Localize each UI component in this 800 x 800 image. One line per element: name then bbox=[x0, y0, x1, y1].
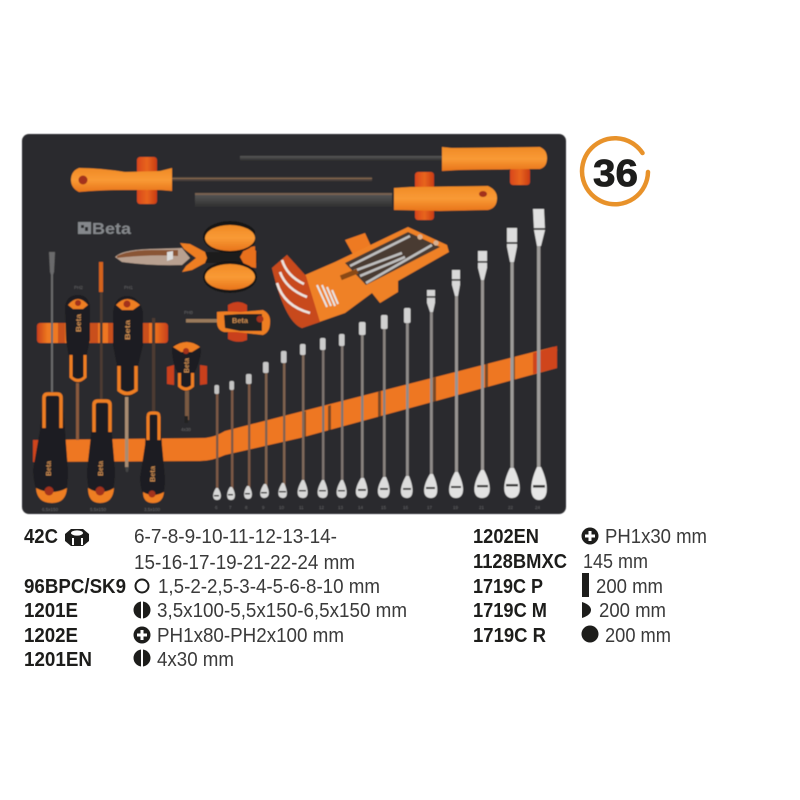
wrench size labels: 10 bbox=[279, 505, 285, 510]
wrench 16 bbox=[401, 308, 413, 498]
wrench 19 bbox=[449, 270, 463, 498]
row: 1719C R bbox=[473, 625, 671, 647]
wrench 14 bbox=[356, 322, 368, 498]
tool: Phillips screwdriver PH2: PH1 bbox=[124, 285, 133, 290]
row: 1128BMXC: 1128BMXC bbox=[473, 551, 567, 573]
row: 1202E: 1202E bbox=[24, 625, 78, 647]
wrench 17 bbox=[424, 290, 437, 498]
icon: hex nut bbox=[65, 529, 89, 546]
wrench 22 bbox=[504, 228, 520, 498]
wrench 11 bbox=[298, 344, 308, 498]
tool: Phillips screwdriver PH1 bbox=[65, 285, 90, 440]
tool: hex key set bbox=[272, 227, 449, 328]
wrench size labels: 9 bbox=[262, 505, 265, 510]
wrench size labels: 17 bbox=[427, 505, 433, 510]
row: 1719C P: 1719C P bbox=[473, 576, 543, 598]
legend: right column bbox=[473, 526, 707, 647]
wrench size labels: 16 bbox=[403, 505, 409, 510]
wrench size labels: 19 bbox=[453, 505, 459, 510]
row: 96BPC/SK9: 1,5-2-2,5-3-4-5-6-8-10 mm bbox=[158, 576, 380, 598]
tool: medium flat screwdriver: Beta bbox=[98, 461, 105, 476]
wrench size labels: 21 bbox=[479, 505, 485, 510]
wrench 21 bbox=[474, 251, 490, 498]
tool: Phillips screwdriver PH2: Beta bbox=[125, 320, 132, 340]
badge: 36 pieces bbox=[582, 138, 648, 204]
row: 42C: 6-7-8-9-10-11-12-13-14- bbox=[134, 526, 337, 548]
icon: round file section bbox=[582, 626, 598, 642]
row: 1719C P bbox=[473, 573, 663, 598]
tool: small flat screwdriver: 3,5x100 bbox=[144, 507, 161, 512]
wrench size labels: 8 bbox=[245, 505, 248, 510]
wrench 10 bbox=[278, 351, 287, 498]
tool: round file, upper right bbox=[240, 147, 547, 185]
icon: slotted tip bbox=[134, 649, 150, 667]
wrench size labels: 22 bbox=[508, 505, 514, 510]
row: 1719C M bbox=[473, 600, 666, 622]
row: 96BPC/SK9: 96BPC/SK9 bbox=[24, 576, 126, 598]
tool: stubby flat screwdriver bbox=[167, 342, 207, 432]
wrench size labels: 11 bbox=[299, 505, 304, 510]
row: 1719C P: 200 mm bbox=[596, 576, 663, 598]
icon: slotted tip bbox=[134, 601, 150, 619]
wrench 9 bbox=[260, 362, 269, 498]
wrench size labels: 6 bbox=[215, 505, 218, 510]
tool: stubby Phillips screwdriver, horizontal bbox=[184, 302, 270, 342]
tool: large flat screwdriver: Beta bbox=[46, 461, 53, 476]
badge: 36 pieces: 36 bbox=[593, 153, 638, 195]
wrench 13 bbox=[337, 334, 347, 498]
row: 1202E bbox=[24, 625, 344, 647]
tool: large flat screwdriver: 6,5x150 bbox=[42, 507, 59, 512]
row: 42C bbox=[24, 526, 355, 574]
row: 1719C M: 1719C M bbox=[473, 600, 547, 622]
wrench 8 bbox=[244, 374, 252, 499]
tool: large flat screwdriver bbox=[33, 252, 68, 512]
tool: stubby Phillips screwdriver, horizontal: Beta bbox=[232, 318, 248, 325]
row: 1201E: 3,5x100-5,5x150-6,5x150 mm bbox=[157, 600, 407, 622]
tool: scissors bbox=[115, 221, 257, 293]
wrench size labels bbox=[215, 505, 541, 510]
tool: flat file, centre bbox=[195, 172, 497, 220]
wrench 6 bbox=[213, 385, 221, 500]
wrench size labels: 24 bbox=[535, 505, 541, 510]
tool: half-round file, upper left bbox=[71, 157, 372, 204]
row: 1202EN: PH1x30 mm bbox=[605, 526, 707, 548]
row: 1719C R: 1719C R bbox=[473, 625, 547, 647]
row: 96BPC/SK9 bbox=[24, 576, 380, 598]
wrench size labels: 13 bbox=[338, 505, 344, 510]
row: 1201E bbox=[24, 600, 407, 622]
row: 1201EN: 4x30 mm bbox=[157, 649, 234, 671]
row: 1202EN bbox=[473, 526, 707, 548]
row: 1719C R: 200 mm bbox=[605, 625, 671, 647]
tool: stubby flat screwdriver: 4x30 bbox=[181, 427, 191, 432]
row: 1719C M: 200 mm bbox=[599, 600, 666, 622]
tool: small flat screwdriver bbox=[140, 318, 165, 512]
row: 42C: 42C bbox=[24, 526, 58, 548]
rail: upper left orange holder bbox=[37, 323, 168, 343]
tool: medium flat screwdriver: 5,5x150 bbox=[90, 507, 107, 512]
wrench 24 bbox=[531, 209, 547, 500]
row: 42C: 15-16-17-19-21-22-24 mm bbox=[134, 552, 355, 574]
wrench size labels: 14 bbox=[358, 505, 364, 510]
row: 1202EN: 1202EN bbox=[473, 526, 539, 548]
tool: medium flat screwdriver bbox=[87, 262, 115, 512]
tool: stubby Phillips screwdriver, horizontal: PH0 bbox=[184, 310, 193, 315]
row: 1128BMXC: 145 mm bbox=[583, 551, 648, 573]
wrench 15 bbox=[378, 315, 390, 498]
row: 1202E: PH1x80-PH2x100 mm bbox=[157, 625, 344, 647]
wrench 12 bbox=[318, 338, 328, 498]
tool: stubby flat screwdriver: Beta bbox=[184, 358, 191, 373]
wrench size labels: 15 bbox=[381, 505, 387, 510]
rail: long diagonal orange holder bbox=[33, 346, 557, 462]
tool: Phillips screwdriver PH1: PH2 bbox=[74, 285, 83, 290]
row: 1201EN: 1201EN bbox=[24, 649, 92, 671]
icon: Phillips tip bbox=[134, 626, 150, 644]
icon: hex socket ring bbox=[136, 580, 148, 592]
icon: half-round file section bbox=[582, 602, 591, 618]
icon: Phillips tip bbox=[582, 528, 598, 544]
legend: left column bbox=[24, 526, 407, 671]
tool set: combination wrenches 6 to 24 mm bbox=[213, 209, 547, 500]
icon: flat file section bbox=[582, 573, 589, 597]
tool: small flat screwdriver: Beta bbox=[150, 466, 157, 482]
row: 1201EN bbox=[24, 649, 234, 671]
logo: Beta bbox=[78, 221, 131, 238]
row: 1201E: 1201E bbox=[24, 600, 78, 622]
panel: foam tool tray bbox=[22, 134, 566, 514]
wrench 7 bbox=[227, 381, 235, 500]
tool: Phillips screwdriver PH2 bbox=[113, 285, 143, 472]
wrench size labels: 7 bbox=[229, 505, 232, 510]
wrench size labels: 12 bbox=[319, 505, 325, 510]
logo: Beta: Beta bbox=[92, 221, 131, 238]
tool: Phillips screwdriver PH1: Beta bbox=[76, 314, 83, 332]
row: 1128BMXC bbox=[473, 551, 648, 573]
